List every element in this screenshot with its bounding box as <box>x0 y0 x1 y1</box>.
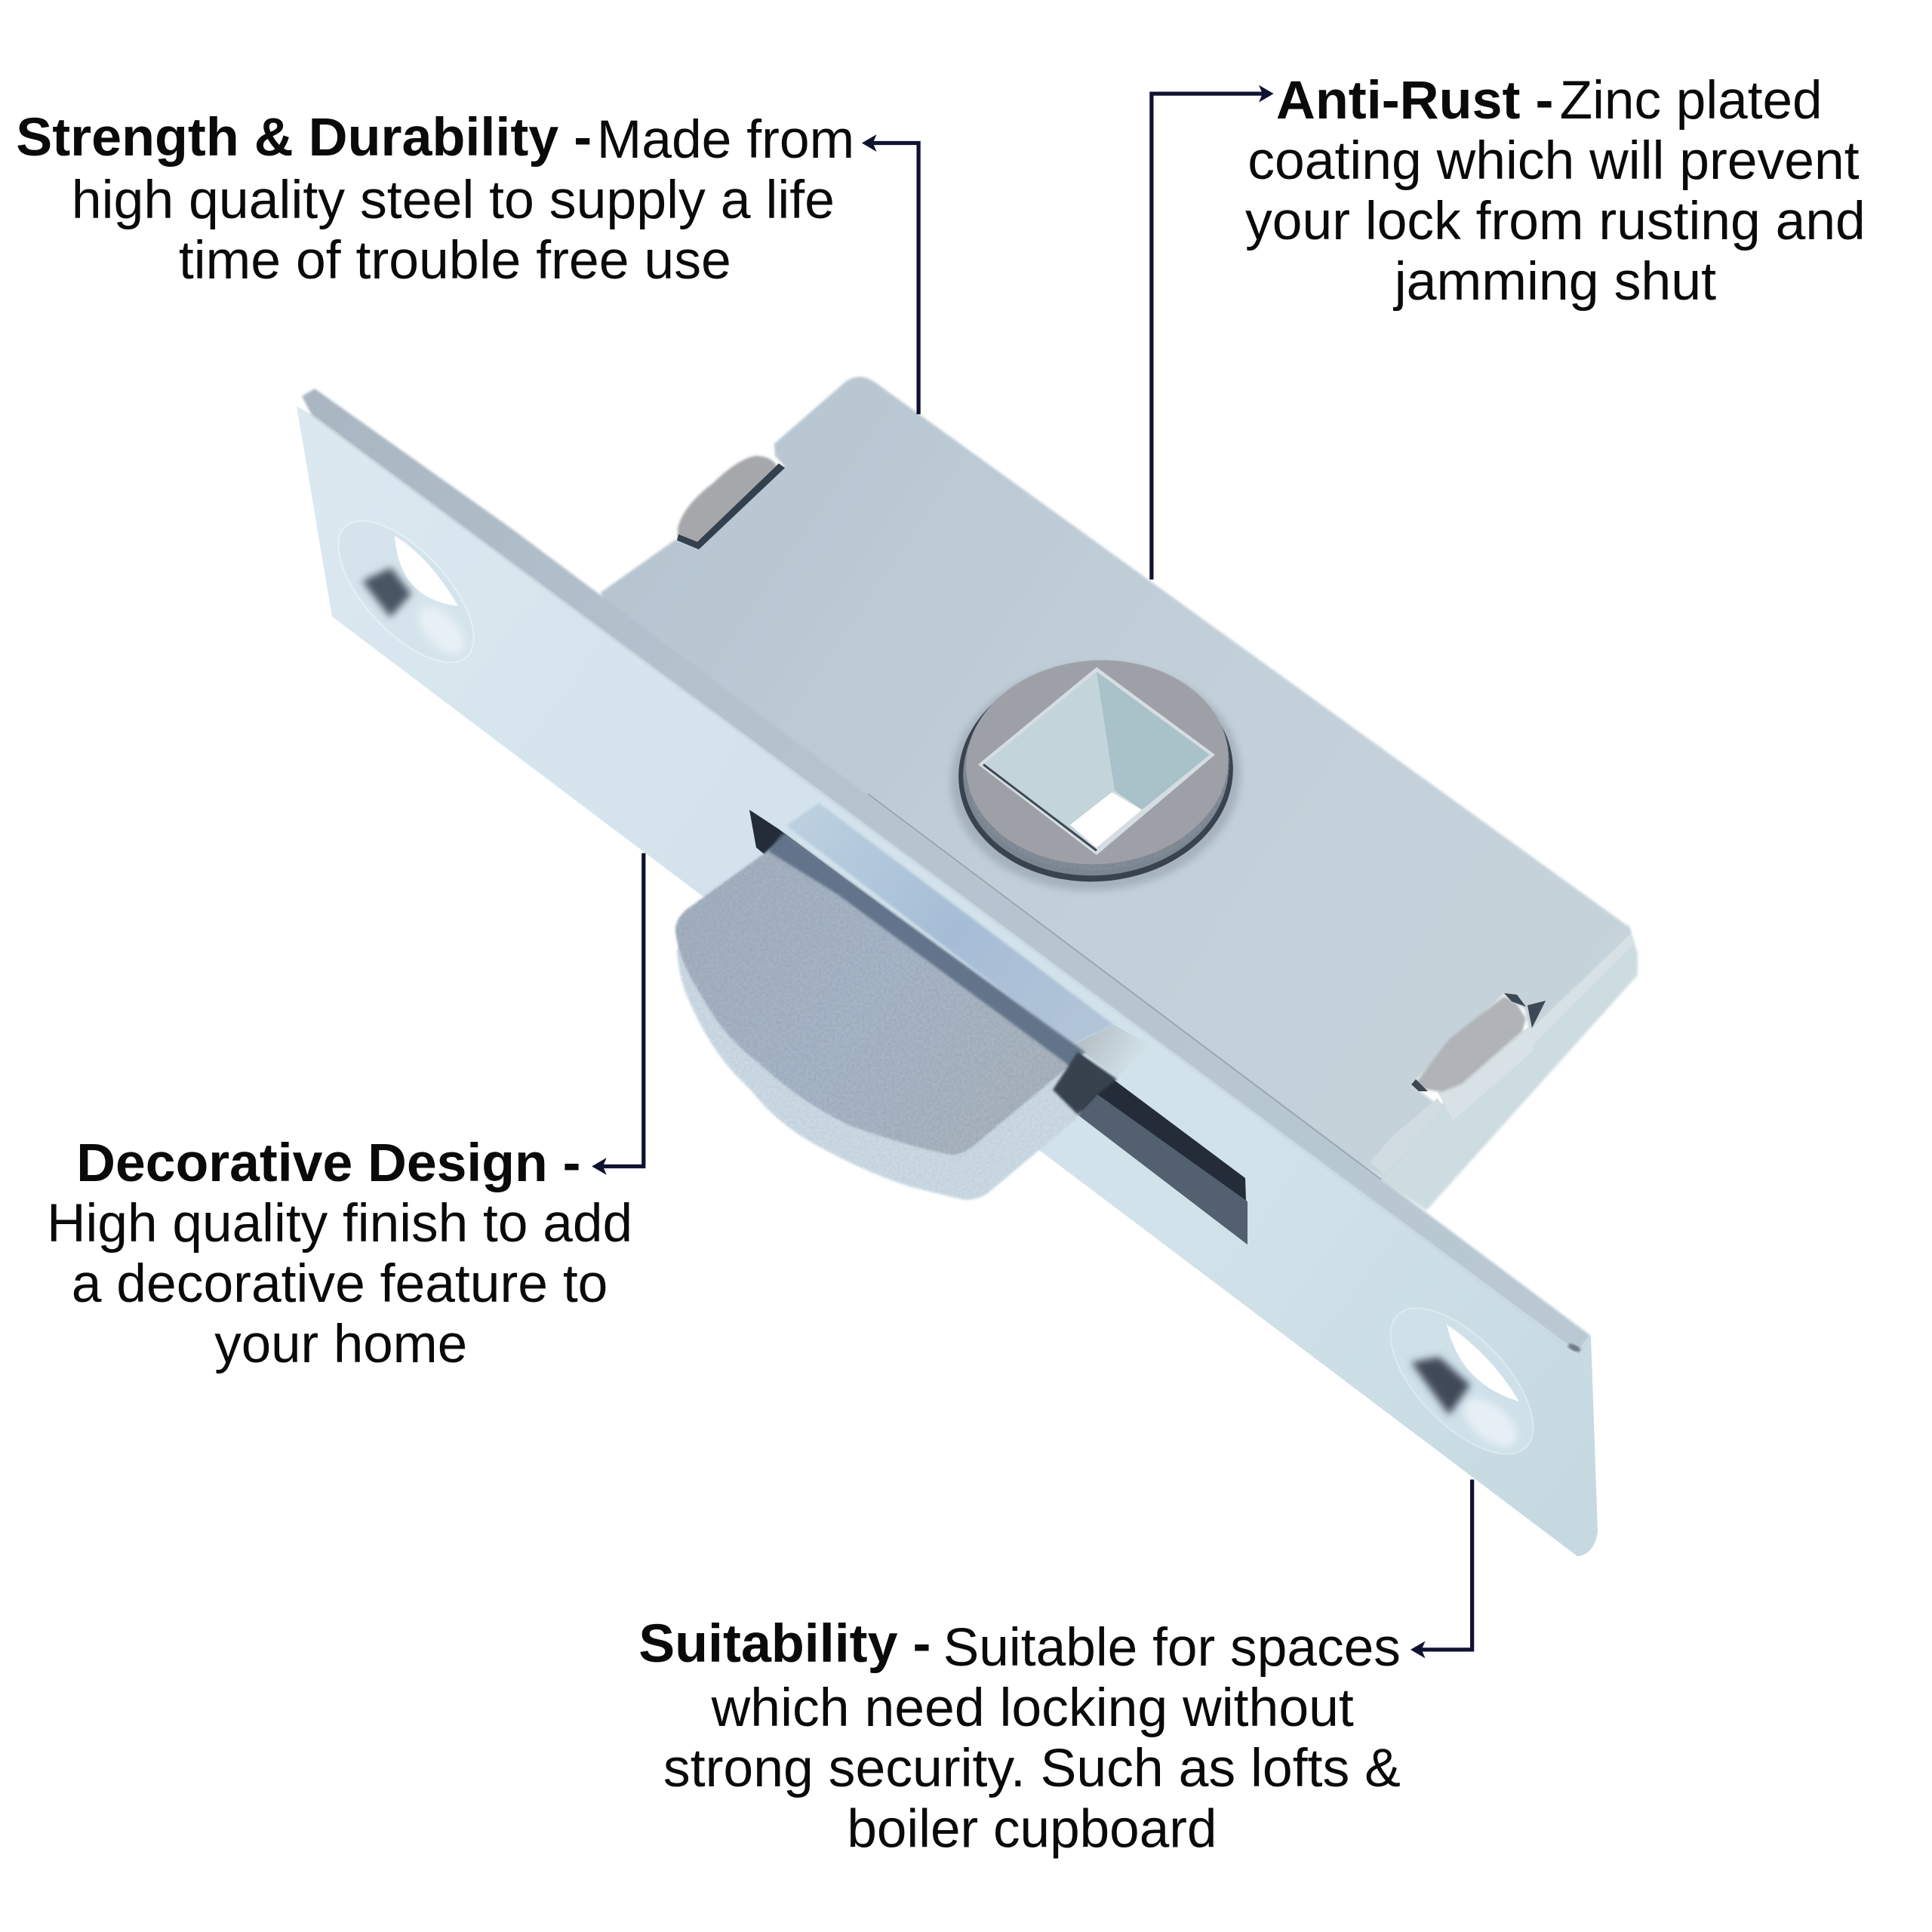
heading: Decorative Design - <box>76 1133 580 1193</box>
square hole right wall <box>1097 672 1210 810</box>
square hole rim <box>978 667 1215 855</box>
notch right <box>1527 1001 1546 1028</box>
bolt top strip <box>786 803 1114 1045</box>
line: a decorative feature to <box>72 1254 608 1314</box>
faceplate <box>297 406 1598 1556</box>
bolt top face <box>675 835 1079 1155</box>
lower pin <box>1417 996 1526 1092</box>
heading: Suitability - <box>638 1614 931 1674</box>
upper pin <box>678 456 777 545</box>
line: Zinc plated <box>1560 70 1823 131</box>
callout: decorative design <box>47 1133 632 1374</box>
upper pin shadow <box>677 463 785 549</box>
bolt body <box>675 833 1087 1200</box>
arrowhead <box>1411 1641 1426 1658</box>
heading: Anti-Rust - <box>1276 70 1553 131</box>
callout: anti-rust <box>1245 70 1866 312</box>
see-through opening <box>1070 792 1142 848</box>
bevel top groove line <box>868 794 1381 1180</box>
slot inner highlight <box>1078 1094 1247 1244</box>
spindle disc <box>943 651 1248 900</box>
body end band <box>1531 934 1634 1045</box>
line: coating which will prevent <box>1247 131 1860 191</box>
right countersink shadow <box>1411 1357 1470 1415</box>
line: Suitable for spaces <box>943 1617 1401 1678</box>
left hole opening <box>395 536 458 606</box>
arrowhead <box>862 134 877 152</box>
disc shadow halo <box>943 654 1248 900</box>
left countersink shadow <box>362 568 411 617</box>
faceplate top bevel <box>302 389 1591 1353</box>
lower pin lip <box>1438 1026 1534 1121</box>
line: boiler cupboard <box>847 1798 1217 1859</box>
line: High quality finish to add <box>47 1193 632 1254</box>
line: strong security. Such as lofts & <box>663 1738 1401 1798</box>
line: your lock from rusting and <box>1245 191 1866 251</box>
body lower corner <box>1370 1098 1444 1175</box>
heading: Strength & Durability - <box>16 107 592 168</box>
square hole left wall <box>983 672 1115 851</box>
arrowhead <box>1259 85 1274 103</box>
line: time of trouble free use <box>179 230 731 291</box>
lock body side edge <box>1343 924 1638 1211</box>
left countersink <box>315 499 497 685</box>
right hole opening <box>1447 1324 1519 1401</box>
arrow: anti-rust connector <box>1152 85 1274 580</box>
notch bottom <box>1411 1079 1428 1091</box>
line: which need locking without <box>711 1678 1354 1738</box>
arrowhead <box>592 1158 607 1175</box>
callout: suitability <box>638 1614 1401 1859</box>
disc face <box>959 651 1235 873</box>
bolt shadow band <box>768 833 1085 1066</box>
square hole lower edge <box>983 764 1097 851</box>
product photo: mortice lock <box>297 377 1638 1556</box>
lock body top plate <box>601 377 1630 1175</box>
bolt front edge <box>677 849 1087 1200</box>
notch top <box>1504 993 1526 1007</box>
left fixing hole <box>315 499 497 685</box>
callout: strength and durability <box>16 107 854 291</box>
line: high quality steel to supply a life <box>72 170 835 230</box>
line: your home <box>214 1314 467 1374</box>
arrow: strength connector <box>862 134 918 414</box>
disc edge band <box>956 658 1235 884</box>
line: Made from <box>597 109 854 170</box>
right countersink bright <box>1456 1389 1525 1456</box>
left countersink bright <box>411 599 472 661</box>
line: jamming shut <box>1393 251 1716 312</box>
lower notch shadows <box>1411 993 1546 1091</box>
slot dark end near bolt <box>1053 1052 1117 1115</box>
bevel corner mark <box>1567 1343 1582 1353</box>
disc texture <box>958 653 1237 879</box>
bolt texture <box>675 835 1079 1155</box>
right fixing hole <box>1367 1284 1557 1478</box>
right countersink <box>1367 1284 1557 1478</box>
arrow: suitability connector <box>1411 1479 1472 1658</box>
arrow: decorative connector <box>592 854 644 1175</box>
disc outer rim <box>951 655 1241 891</box>
strip fade into plate <box>1073 1025 1150 1077</box>
bolt front edge texture <box>677 849 1078 1200</box>
bolt slot <box>749 810 1247 1244</box>
